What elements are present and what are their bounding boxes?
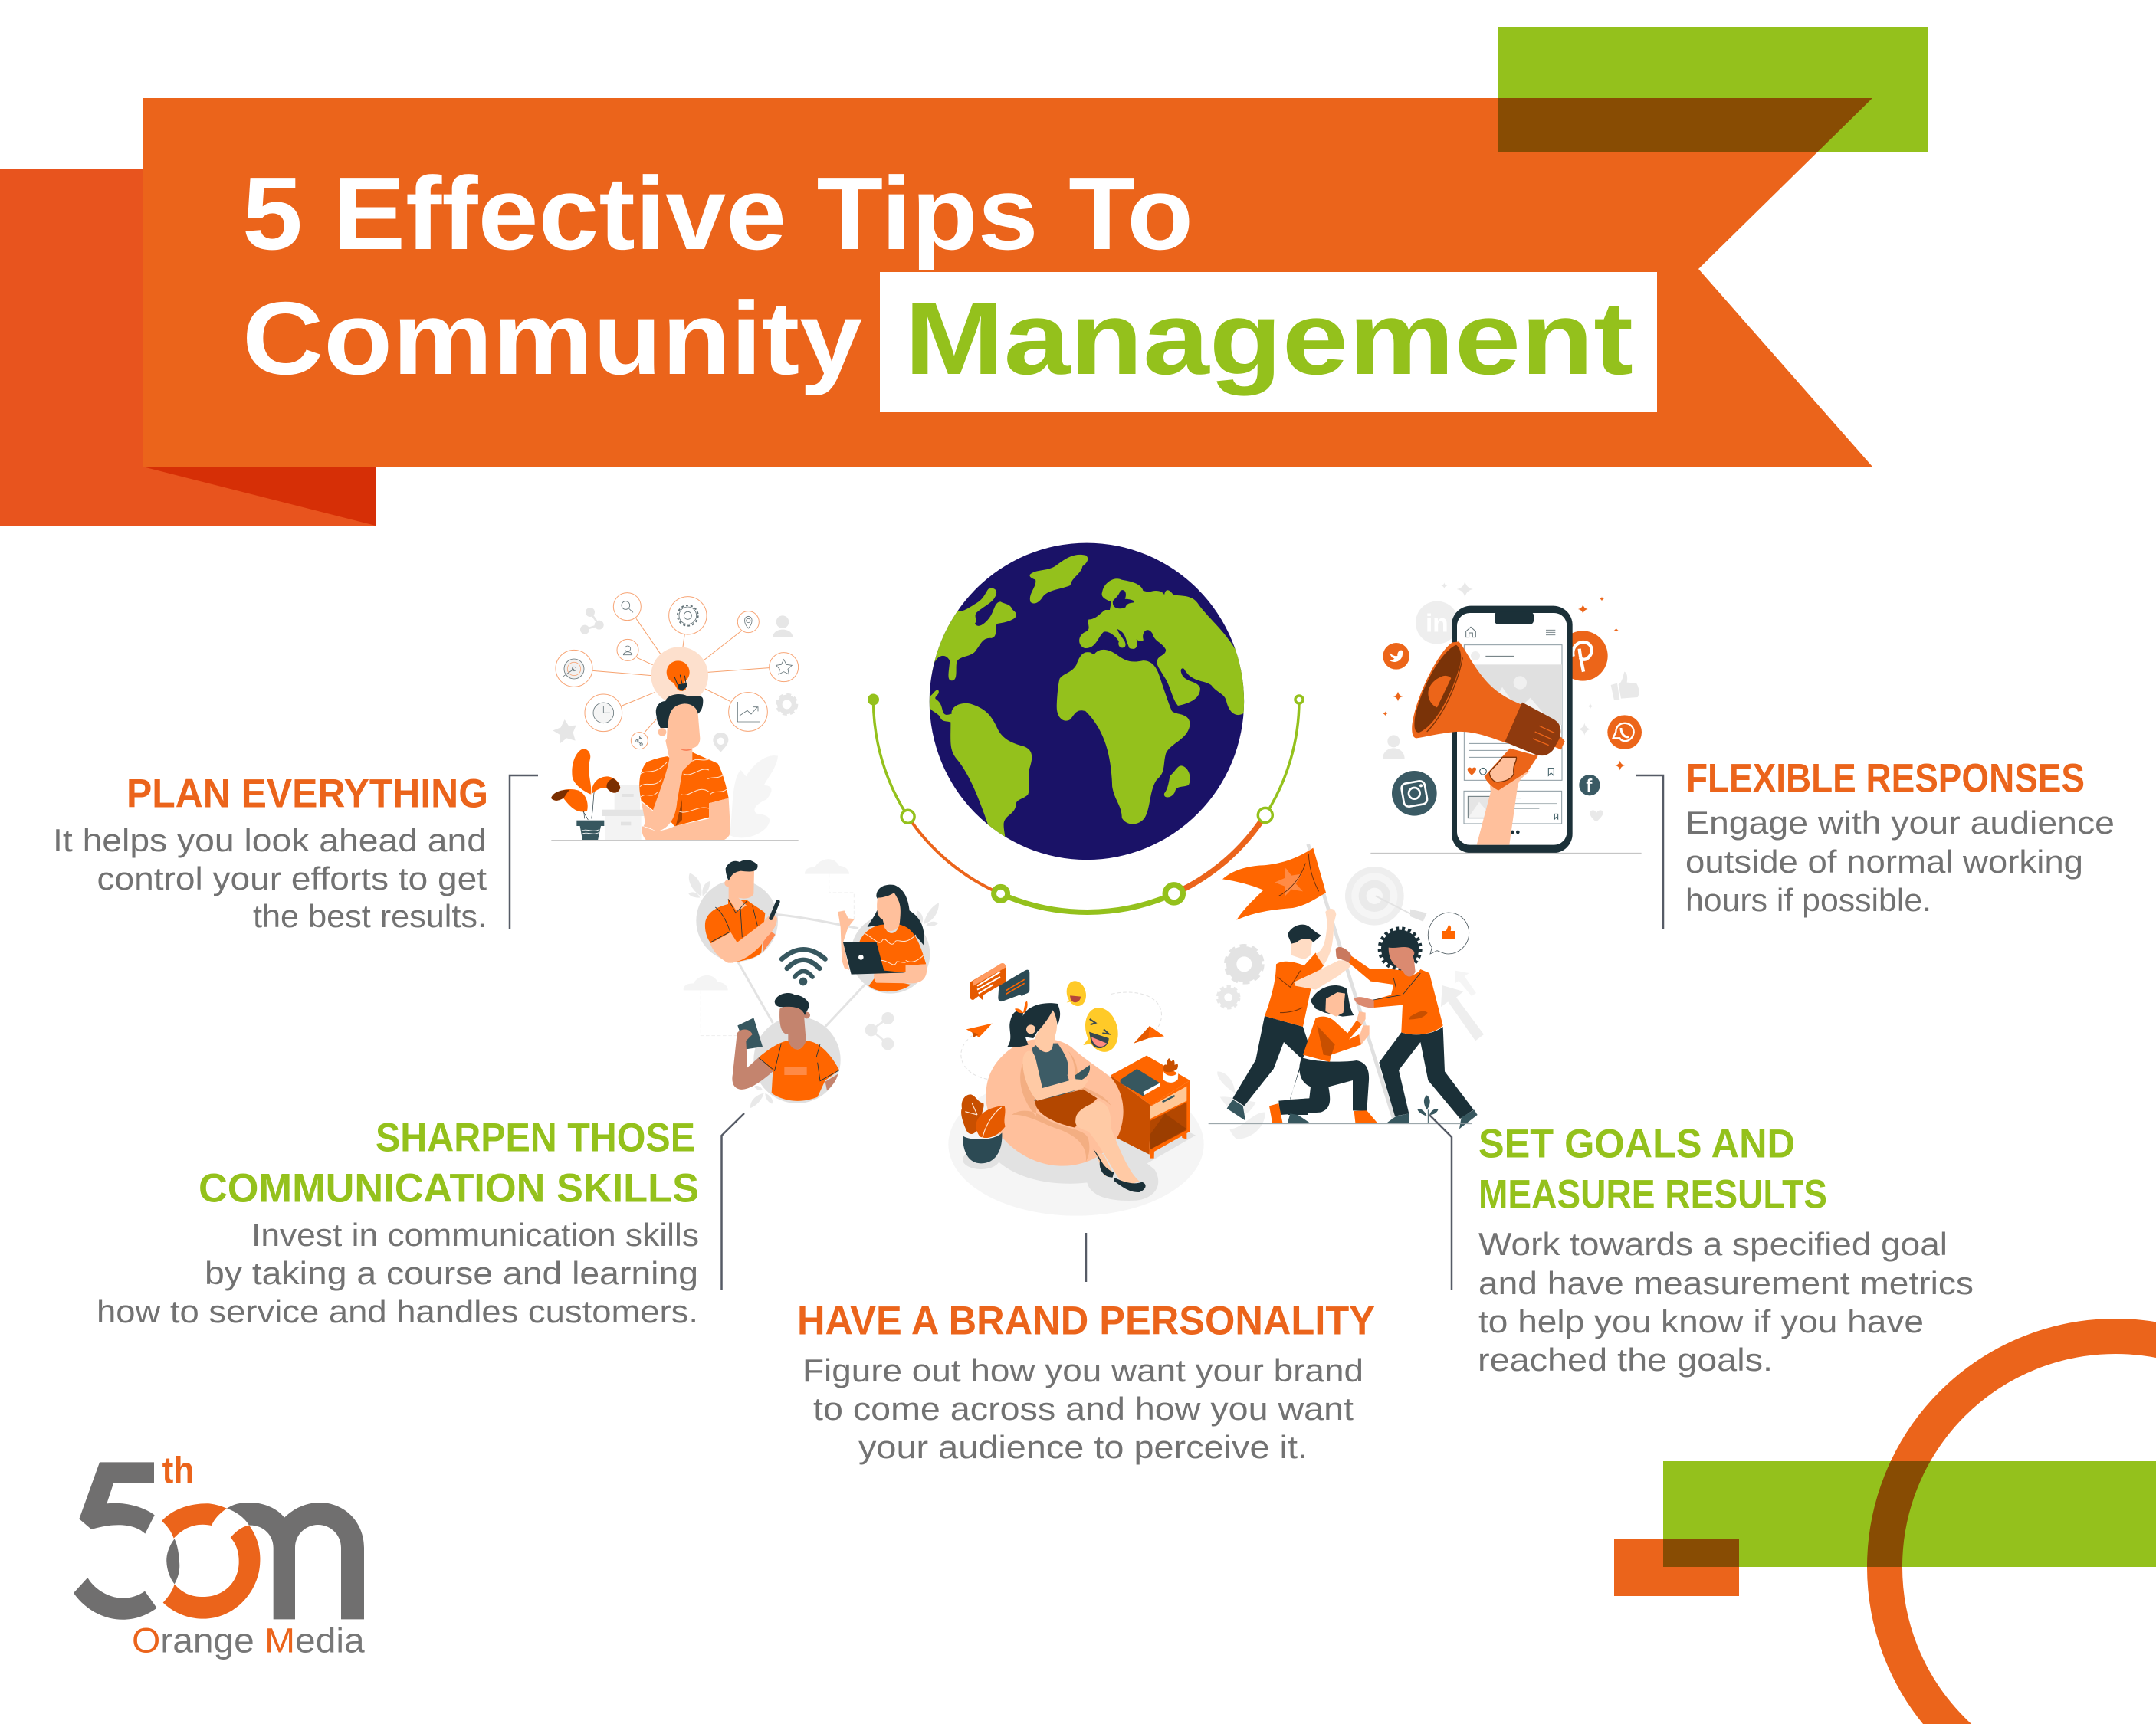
body: Figure out how you want your brand [802,1352,1363,1388]
potted plant [961,1094,1006,1163]
title word community: Community [242,280,862,396]
banner back fold [0,169,376,526]
body [802,1352,1363,1465]
connection lines [737,914,865,1027]
text block: set goals [1478,1122,1974,1378]
text block: communication skills [97,1116,699,1329]
man with phone [705,860,778,963]
body [53,822,487,934]
grey decoration [553,608,797,752]
body: how to service and handles customers. [97,1293,698,1329]
body: and have measurement metrics [1478,1265,1974,1301]
heading: SET GOALS AND [1478,1122,1795,1166]
phone [1452,606,1573,853]
flag pole [1308,844,1395,1123]
body: It helps you look ahead and [53,822,487,858]
logo letter o [162,1503,260,1619]
woman with laptop [838,885,927,991]
floor [948,1073,1204,1216]
arc with nodes under the globe [868,694,1303,912]
grey decoration [1383,581,1639,822]
ground line [1209,1123,1472,1125]
illustration: team raising a flag [1209,844,1484,1139]
body: to help you know if you have [1478,1303,1924,1339]
body: Engage with your audience [1685,805,2115,841]
body: Work towards a specified goal [1478,1226,1948,1262]
heading: PLAN EVERYTHING [126,771,488,817]
orange sparkles [1383,597,1625,770]
body [1478,1226,1974,1378]
arm holding megaphone [1477,769,1530,845]
green bar [1663,1461,2156,1567]
man with smartphone [732,993,839,1101]
book [1121,1069,1160,1096]
shoes of man left [1227,1100,1309,1123]
plant [551,749,620,841]
body: hours if possible. [1685,882,1931,918]
megaphone [1412,641,1565,791]
globe [904,543,1245,860]
grey decoration: in [1426,610,1449,638]
flag [1222,848,1326,920]
title banner [0,27,1928,526]
heading: MEASURE RESULTS [1478,1172,1827,1217]
man [639,694,730,841]
illustration: connected people [684,859,939,1108]
logo: 5th Orange Media [74,1450,366,1660]
connector: plan everything [510,775,538,929]
bean bag [986,1039,1124,1166]
orange ring [1885,1336,2156,1724]
body: Invest in communication skills [251,1217,699,1253]
nightstand [1111,1056,1190,1159]
body: by taking a course and learning [205,1255,698,1291]
bottom right decoration [1614,1336,2156,1724]
illustration: woman on bean bag with emojis [948,963,1204,1216]
logo numeral five [74,1462,157,1620]
heading: SHARPEN THOSE [376,1116,695,1160]
man left [1232,909,1350,1115]
body [97,1217,699,1329]
connector: set goals [1429,1115,1452,1290]
heading [1478,1122,1827,1217]
idea network nodes [556,593,799,749]
social media icons [1383,643,1642,816]
text block: brand personality [797,1298,1375,1465]
woman kneeling [1269,985,1377,1123]
emojis [1064,978,1123,1056]
dashed flight paths [961,992,1161,1079]
small plant [1163,1058,1178,1083]
body: reached the goals. [1478,1342,1773,1378]
woman [1007,1001,1146,1192]
text block: plan everything [53,771,488,934]
banner ribbon [143,98,1872,467]
heading: COMMUNICATION SKILLS [199,1166,699,1211]
ground line [551,839,799,842]
body: the best results. [253,898,487,934]
logo superscript: th [162,1450,194,1491]
banner fold shadow [143,467,376,526]
logo wordmark: Orange Media [132,1621,366,1660]
grey decoration [1217,867,1484,1139]
connector: flexible responses [1636,775,1663,929]
body: your audience to perceive it. [858,1429,1308,1465]
connector: brand personality [1085,1233,1087,1282]
heading [199,1116,699,1211]
small dark plant [1417,1095,1439,1123]
ground line [1370,852,1642,854]
man right [1336,929,1478,1129]
text block: flexible responses [1685,755,2115,918]
heading: HAVE A BRAND PERSONALITY [797,1298,1375,1344]
title word management: Management [904,280,1633,396]
social media icons: f [1586,775,1593,796]
illustration: man thinking with idea bulb [551,593,799,841]
body [1685,805,2115,918]
small network icons [563,601,792,746]
body: control your efforts to get [97,860,487,896]
idea network lines [592,618,769,732]
hand fingers [1489,757,1517,782]
heading: FLEXIBLE RESPONSES [1686,755,2085,801]
thumbs up speech bubble [1428,913,1469,954]
grey decoration [684,859,854,1036]
chat bubbles [970,963,1029,1001]
wifi icon [782,949,825,984]
illustration: phone and megaphone [1370,581,1642,853]
logo letter m [227,1503,364,1619]
light bulb [667,660,690,691]
connector: communication skills [722,1113,744,1290]
pinterest icon [1557,631,1608,681]
title line one: 5 Effective Tips To [242,156,1193,271]
paper planes [966,1024,1164,1044]
body: outside of normal working [1685,844,2083,880]
green corner rectangle [1498,27,1928,152]
small orange rectangle [1614,1539,1739,1596]
body: to come across and how you want [813,1391,1354,1427]
title highlight box [880,272,1657,412]
